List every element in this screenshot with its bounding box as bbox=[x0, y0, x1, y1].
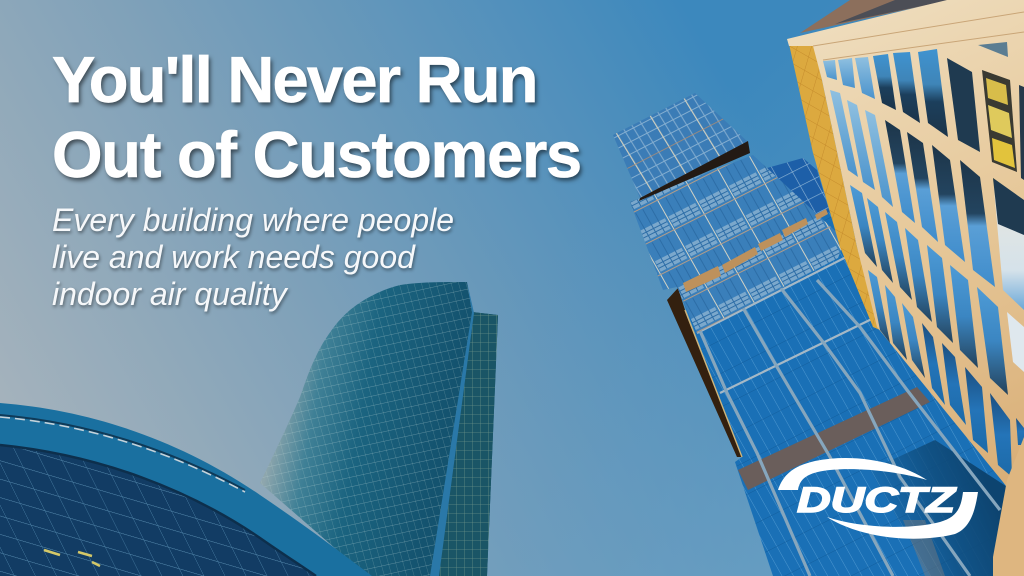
lower right cream column bbox=[993, 437, 1024, 576]
title: You'll Never Run bbox=[52, 43, 537, 116]
curved glass tower, lower left bbox=[260, 282, 498, 576]
top tilted block bbox=[613, 93, 748, 198]
logo wordmark: DUCTZ bbox=[797, 481, 957, 520]
title bbox=[52, 43, 584, 191]
orange panel bands bbox=[683, 209, 828, 292]
subtitle: Every building where people bbox=[52, 202, 454, 238]
logo bottom swoosh bbox=[827, 492, 978, 539]
right building, cream and yellow facade bbox=[787, 0, 1024, 576]
roof bbox=[800, 0, 950, 33]
lower tower section, large blue glass panels bbox=[678, 204, 1024, 576]
yellow tiled side bbox=[789, 42, 880, 330]
dark underside strip bbox=[667, 288, 742, 457]
first tall row bbox=[830, 90, 858, 177]
title: Out of Customers bbox=[52, 118, 581, 191]
cream facade bbox=[787, 0, 1024, 505]
Ductz logo bbox=[778, 458, 978, 539]
rear tower block bbox=[767, 158, 835, 232]
second tall row bbox=[850, 185, 877, 267]
subtitle: live and work needs good bbox=[52, 239, 415, 275]
middle tower section, small panels bbox=[630, 155, 845, 333]
domed glass building, bottom left bbox=[0, 403, 372, 576]
subtitle bbox=[52, 202, 456, 316]
top row windows bbox=[823, 60, 837, 80]
logo top swoosh bbox=[778, 458, 927, 490]
middle tower, stepped glass skyscraper bbox=[613, 93, 1024, 576]
subtitle: indoor air quality bbox=[52, 276, 287, 312]
dark gap under top block bbox=[639, 141, 750, 201]
brown spandrel band bbox=[738, 387, 930, 490]
third short row bbox=[868, 270, 890, 343]
facade windows bbox=[823, 42, 1024, 477]
